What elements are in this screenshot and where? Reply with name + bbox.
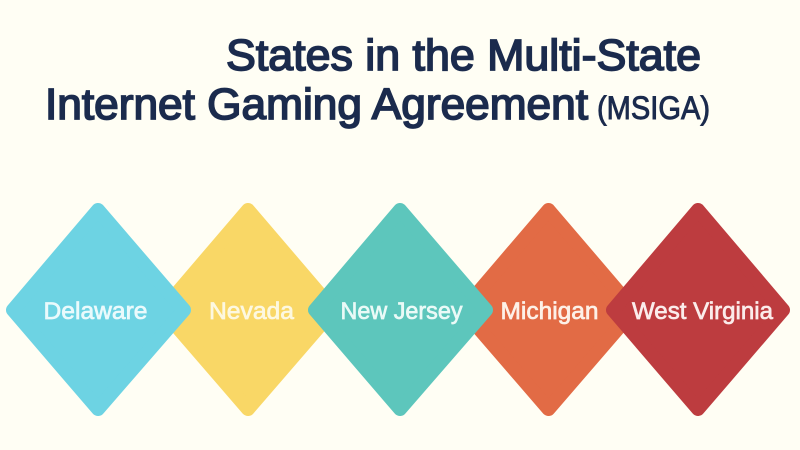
diamond: Michigan: Michigan [500, 298, 598, 325]
title: States in the Multi-State [226, 31, 701, 80]
diamond: New Jersey [315, 210, 486, 409]
diamond: Michigan [463, 210, 634, 409]
diamond: West Virginia: West Virginia [632, 298, 774, 325]
title: Internet Gaming Agreement [45, 80, 588, 129]
diamond: Delaware: Delaware [44, 298, 148, 325]
diamond: West Virginia [613, 210, 783, 409]
diamond: Delaware [13, 210, 184, 409]
title: (MSIGA) [597, 90, 710, 126]
diamond: Nevada: Nevada [209, 298, 295, 325]
diamond: Nevada [162, 210, 334, 409]
diamond: New Jersey: New Jersey [340, 298, 462, 325]
title [45, 31, 710, 129]
